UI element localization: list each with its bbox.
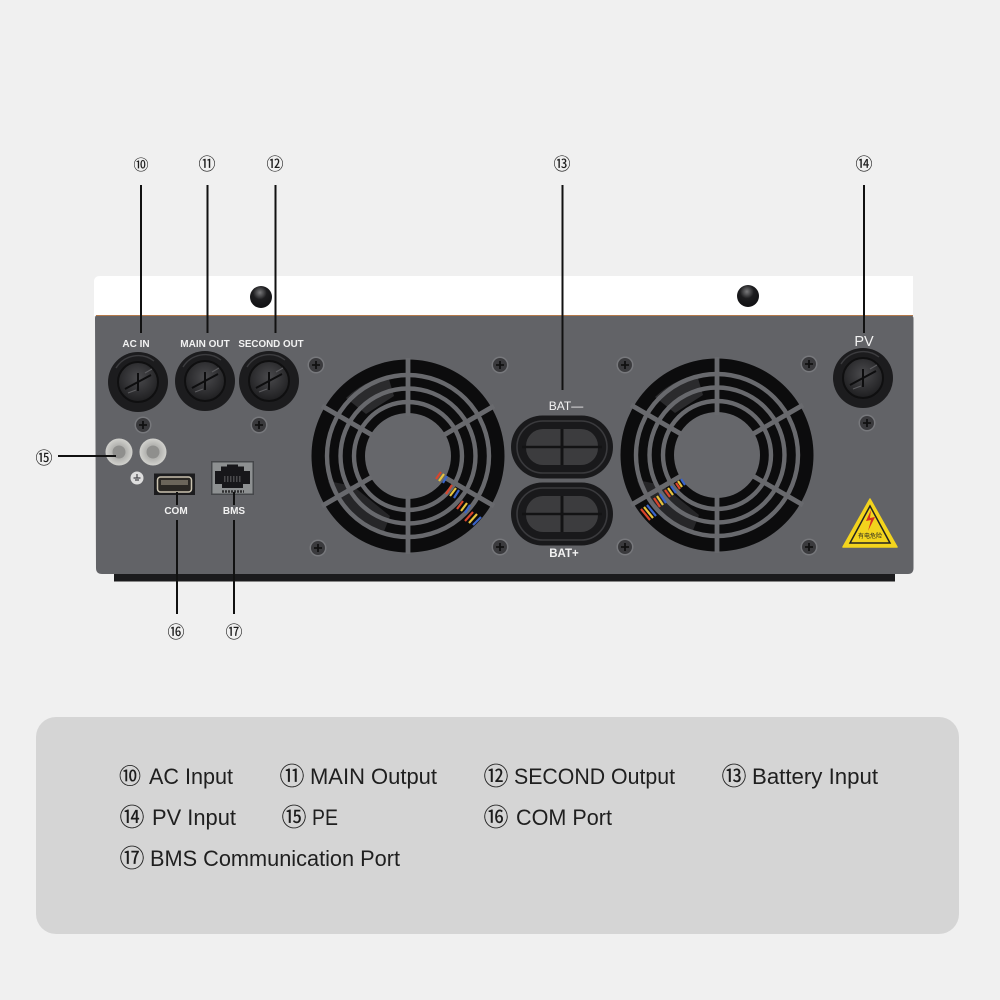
callout numbers: ⑬ bbox=[554, 150, 570, 175]
legend row 3 bbox=[119, 839, 401, 875]
USB COM port bbox=[154, 474, 195, 495]
legend row 1: ⑬ bbox=[721, 757, 747, 793]
inverter rear view bbox=[94, 276, 914, 582]
panel labels: BAT— bbox=[549, 399, 583, 413]
legend panel bbox=[36, 717, 959, 934]
fan left bbox=[312, 358, 504, 554]
legend row 2 bbox=[119, 798, 613, 834]
legend row 1: ⑪ bbox=[279, 757, 305, 793]
orange edge bbox=[96, 314, 913, 316]
callout numbers: ⑫ bbox=[266, 150, 284, 175]
PE grounding terminals bbox=[106, 438, 166, 484]
legend row 1: AC Input bbox=[149, 764, 234, 789]
panel labels: BAT+ bbox=[549, 548, 579, 560]
panel labels: MAIN OUT bbox=[180, 339, 230, 350]
callout numbers: ⑩ bbox=[133, 154, 149, 175]
panel screws bbox=[134, 356, 876, 556]
legend row 3: BMS Communication Port bbox=[150, 846, 401, 871]
black base strip bbox=[114, 570, 895, 582]
legend row 2: ⑭ bbox=[119, 798, 145, 834]
fan right bbox=[620, 357, 814, 553]
callout numbers: ⑯ bbox=[168, 618, 184, 643]
legend row 1: ⑫ bbox=[483, 757, 509, 793]
top cover screws bbox=[250, 285, 759, 308]
callout numbers: ⑭ bbox=[856, 150, 872, 175]
panel labels: SECOND OUT bbox=[238, 339, 304, 350]
callout numbers: ⑪ bbox=[198, 150, 216, 175]
legend row 2: PV Input bbox=[152, 805, 237, 830]
callout lines bbox=[58, 185, 864, 614]
rear panel bbox=[95, 315, 914, 574]
legend row 1: MAIN Output bbox=[310, 764, 438, 789]
panel labels: COM bbox=[164, 506, 188, 517]
panel labels: PV bbox=[854, 334, 874, 350]
battery terminal covers bbox=[511, 416, 613, 546]
legend row 3: ⑰ bbox=[119, 839, 145, 875]
panel labels bbox=[122, 334, 874, 560]
panel labels: AC IN bbox=[122, 339, 150, 350]
RJ45 BMS port bbox=[211, 461, 254, 495]
warning triangle bbox=[843, 499, 897, 547]
callout numbers: ⑰ bbox=[226, 618, 242, 643]
warning triangle: 有电危险 bbox=[858, 531, 882, 540]
legend row 1: SECOND Output bbox=[514, 764, 676, 789]
legend row 1: ⑩ bbox=[119, 759, 141, 791]
legend row 2: COM Port bbox=[516, 805, 613, 830]
white top cover bbox=[94, 276, 913, 316]
legend row 1 bbox=[119, 757, 879, 793]
callout numbers bbox=[36, 150, 872, 643]
legend row 2: PE bbox=[312, 805, 338, 830]
legend row 2: ⑯ bbox=[483, 798, 509, 834]
legend row 1: Battery Input bbox=[752, 764, 879, 789]
cable glands bbox=[108, 348, 893, 412]
legend row 2: ⑮ bbox=[281, 798, 307, 834]
panel labels: BMS bbox=[223, 506, 245, 517]
callout numbers: ⑮ bbox=[36, 444, 52, 469]
